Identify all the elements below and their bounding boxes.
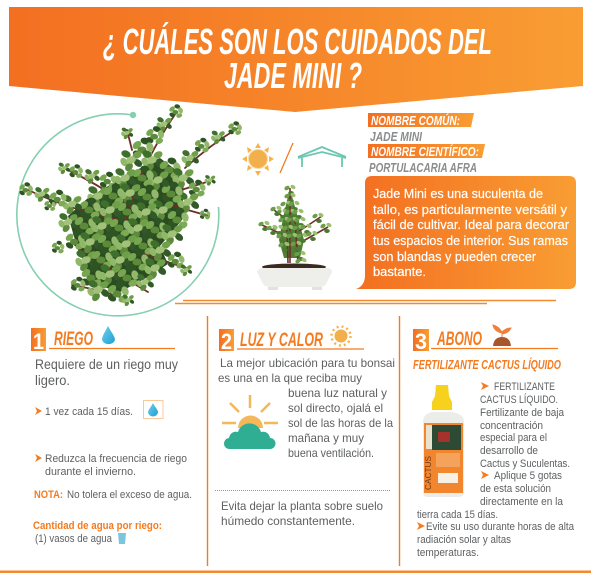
- product instructions: especial para el: [480, 432, 547, 444]
- heading: abono: 3: [415, 329, 427, 354]
- icon: glass of water: [118, 533, 126, 544]
- light text: buena luz natural y: [288, 386, 387, 400]
- product instructions: directamente en la: [480, 496, 564, 508]
- water quantity: Cantidad de agua por riego:: [33, 520, 162, 532]
- product instructions: tierra cada 15 días.: [417, 509, 498, 521]
- light text: buena ventilación.: [288, 446, 374, 460]
- icon: water drop: [102, 326, 115, 344]
- product bottle: [423, 385, 464, 497]
- product instructions: Evite su uso durante horas de alta: [426, 521, 575, 533]
- heading: luz y calor: LUZ Y CALOR: [240, 330, 323, 351]
- product instructions: de esta solución: [480, 483, 551, 495]
- panel: abono: [413, 325, 575, 559]
- water quantity: (1) vasos de agua: [35, 533, 113, 545]
- light text: [218, 356, 395, 460]
- bonsai photo: [257, 184, 332, 290]
- light text: sol de las horas de la: [288, 416, 393, 430]
- soil warning text: húmedo constantemente.: [221, 514, 355, 528]
- light text: La mejor ubicación para tu bonsai: [220, 356, 395, 370]
- description callout: fácil de cultivar. Ideal para decorar: [373, 217, 570, 232]
- panel: luz y calor: [215, 326, 395, 528]
- heading: abono: [413, 329, 558, 354]
- product instructions: CACTUS LÍQUIDO.: [480, 393, 558, 406]
- light text: es una en la que reciba muy: [218, 371, 362, 385]
- icon: water drop box: [144, 400, 163, 418]
- product instructions: concentración: [480, 420, 543, 432]
- product instructions: temperaturas.: [417, 547, 479, 559]
- heading: riego: 1: [33, 329, 44, 354]
- title: [103, 21, 492, 96]
- title: JADE MINI ?: [224, 55, 362, 96]
- names block: [368, 113, 485, 175]
- product instructions: [417, 381, 575, 559]
- note: No tolera el exceso de agua.: [67, 489, 192, 501]
- jade plant photo: [18, 104, 243, 307]
- panel: riego: [31, 326, 192, 545]
- product instructions: FERTILIZANTE: [494, 381, 555, 393]
- icon: sun: [242, 143, 274, 176]
- description callout: Jade Mini es una suculenta de: [373, 186, 543, 201]
- header banner: [9, 7, 583, 112]
- common name: JADE MINI: [370, 130, 422, 144]
- scientific name: PORTULACARIA AFRA: [369, 161, 477, 175]
- winter bullet: [35, 453, 187, 478]
- winter bullet: Reduzca la frecuencia de riego: [45, 453, 187, 465]
- soil warning text: Evita dejar la planta sobre suelo: [221, 499, 383, 513]
- description callout: tallo, es particularmente versátil y: [373, 202, 567, 217]
- label: nombre científico: NOMBRE CIENTÍFICO:: [371, 144, 479, 159]
- description callout: son blandas y pueden crecer: [373, 249, 537, 264]
- heading: riego: [31, 328, 175, 354]
- icon: small sun: [332, 326, 350, 346]
- light text: mañana y muy: [288, 431, 364, 445]
- decorative circle around plant: [17, 112, 219, 316]
- label: nombre común: NOMBRE COMÚN:: [371, 113, 460, 128]
- icon: roof shade: [298, 147, 346, 167]
- product instructions: radiación solar y altas: [417, 534, 511, 546]
- product bottle: CACTUS: [424, 456, 433, 490]
- heading: riego: RIEGO: [54, 329, 93, 350]
- bonsai pot: [257, 264, 332, 290]
- soil warning text: [221, 499, 383, 528]
- water quantity: [33, 520, 162, 545]
- description callout: bastante.: [373, 264, 426, 279]
- winter bullet: durante el invierno.: [45, 466, 136, 478]
- description callout: [356, 176, 576, 289]
- intro text: ligero.: [35, 373, 70, 388]
- product instructions: Cactus y Suculentas.: [480, 458, 570, 470]
- light text: sol directo, ojalá el: [288, 401, 383, 415]
- intro text: [35, 357, 178, 388]
- product instructions: Aplique 5 gotas: [494, 470, 562, 482]
- heading: luz y calor: 2: [221, 329, 232, 354]
- heading: abono: ABONO: [436, 329, 482, 350]
- icon: sun behind cloud: [222, 395, 278, 449]
- product instructions: desarrollo de: [480, 445, 538, 457]
- product instructions: Fertilizante de baja: [480, 407, 565, 419]
- icon: sprout in soil: [493, 325, 511, 346]
- intro text: Requiere de un riego muy: [35, 357, 178, 372]
- frequency bullet: 1 vez cada 15 días.: [45, 406, 133, 418]
- note: NOTA:: [34, 489, 63, 501]
- description callout: tus espacios de interior. Sus ramas: [373, 233, 568, 248]
- slash divider: [280, 143, 293, 173]
